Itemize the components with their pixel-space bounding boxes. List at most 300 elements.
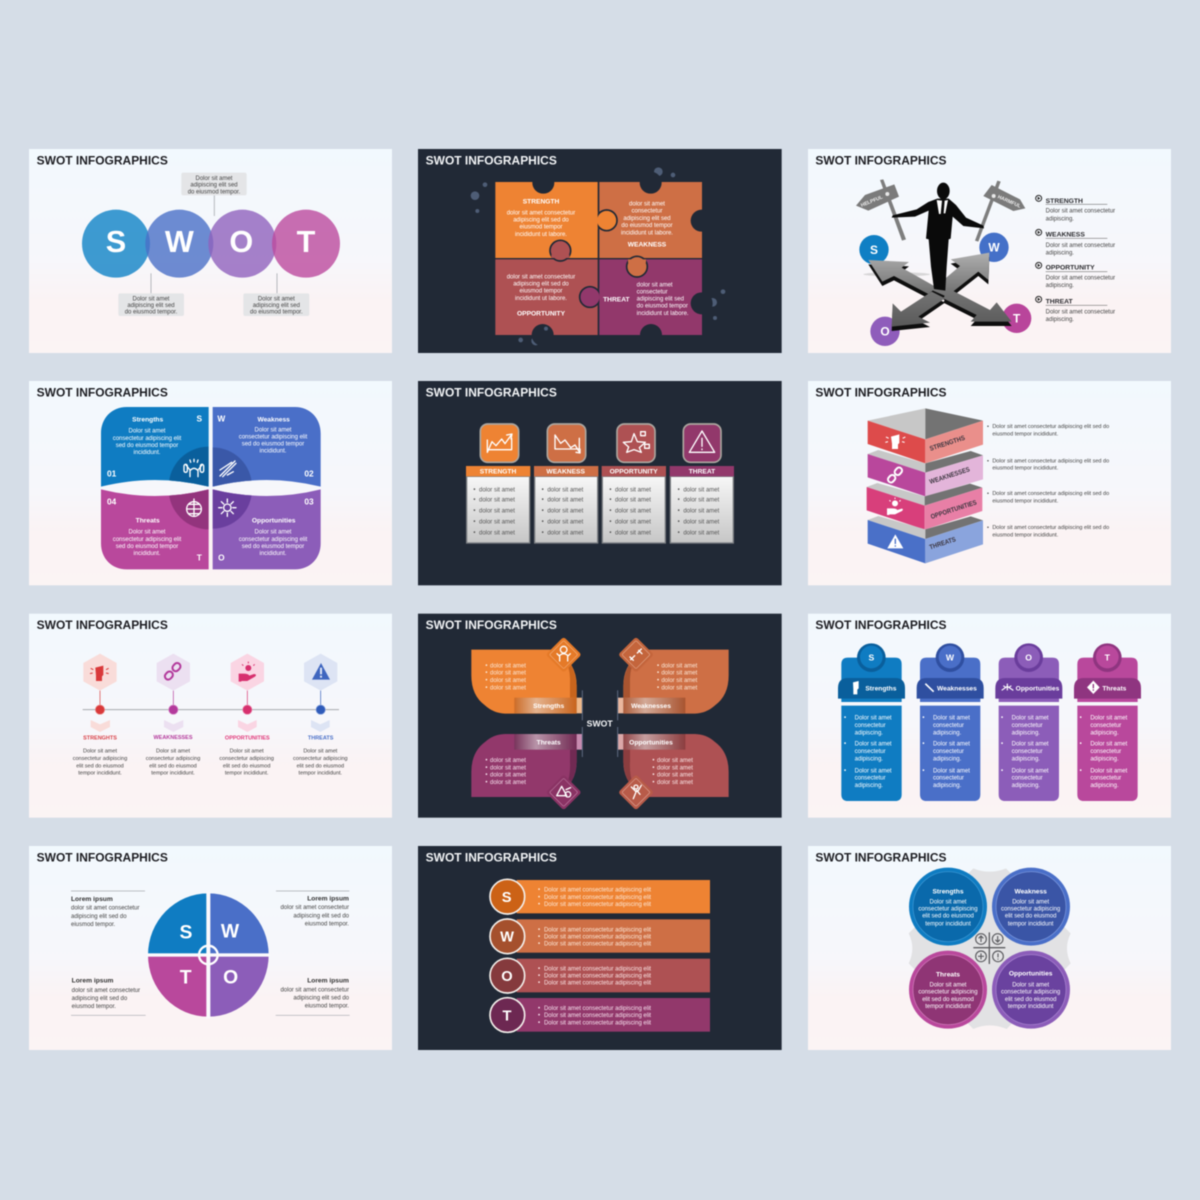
- wing: opportunities: [618, 727, 729, 810]
- column: opportunities: [995, 643, 1062, 801]
- circle: strengths: Strengths: [932, 888, 964, 895]
- quadrant: threats: [100, 488, 210, 570]
- bar S: •: [538, 902, 540, 908]
- note bottom left: [71, 978, 146, 1015]
- bar O: •: [538, 981, 540, 987]
- bullet text group: eiusmod tempor incididunt.: [992, 431, 1059, 437]
- card: opportunity: dolor sit amet: [615, 520, 651, 526]
- card: threat: [670, 466, 734, 543]
- column: threats: consectetur: [1090, 776, 1121, 782]
- note bottom right: adipiscing elit sed do: [293, 996, 350, 1002]
- callout bottom left: adipiscing elit sed: [127, 303, 175, 309]
- callout bottom left: Dolor sit amet: [133, 296, 170, 302]
- step: opportunities: tempor incididunt.: [225, 771, 269, 777]
- column: threats: Dolor sit amet: [1090, 716, 1128, 722]
- block: threats: THREATS: [929, 536, 957, 551]
- bar S: S: [502, 890, 512, 906]
- block: opportunities: [867, 483, 982, 530]
- card: opportunity: •: [609, 531, 611, 537]
- circle: weakness: tempor incididunt: [1008, 921, 1054, 927]
- circle: weakness: Dolor sit amet: [1012, 900, 1049, 906]
- block: weaknesses: [868, 450, 983, 496]
- circle: strengths: Dolor sit amet: [930, 900, 967, 906]
- card: strength: dolor sit amet: [479, 520, 515, 526]
- puzzle piece: strength: dolor sit amet consectetur: [507, 211, 575, 217]
- wing: opportunities: dolor sit amet: [657, 773, 693, 779]
- column: threats: consectetur: [1090, 749, 1121, 755]
- bar W: Dolor sit amet consectetur adipiscing elit: [544, 934, 651, 940]
- card: strength: dolor sit amet: [479, 531, 515, 537]
- list: threat: [1036, 296, 1115, 323]
- column: strengths: •: [844, 716, 846, 722]
- column: weaknesses: Dolor sit amet: [933, 716, 970, 722]
- bullet text group: •: [987, 458, 989, 464]
- card: strength: •: [473, 487, 475, 493]
- bar O: O: [501, 969, 513, 985]
- letter badges: W: [988, 241, 1000, 255]
- quadrant: threats: consectetur adipiscing elit: [113, 537, 182, 543]
- column: weaknesses: Dolor sit amet: [933, 742, 970, 748]
- wing: strengths: •: [485, 678, 487, 684]
- column: threats: Dolor sit amet: [1090, 742, 1128, 748]
- callout bottom left: do eiusmod tempor.: [125, 310, 178, 316]
- wing: strengths: •: [485, 671, 487, 677]
- card: threat: dolor sit amet: [683, 531, 720, 537]
- column: weaknesses: •: [922, 768, 924, 774]
- bar T: •: [538, 1006, 540, 1012]
- card: opportunity: •: [609, 487, 611, 493]
- quadrant: strengths: sed do eiusmod tempor: [116, 443, 178, 449]
- panel: icon cards: [418, 381, 782, 585]
- bar W: Dolor sit amet consectetur adipiscing elit: [544, 927, 651, 933]
- list: opportunity: OPPORTUNITY: [1046, 265, 1095, 272]
- block: strengths: STRENGTHS: [929, 435, 966, 453]
- circle: threats: [909, 951, 987, 1029]
- column: weaknesses: W: [946, 652, 955, 662]
- card: threat: dolor sit amet: [683, 509, 720, 515]
- card: weakness: •: [542, 487, 544, 493]
- column: strengths: •: [844, 768, 846, 774]
- businessman silhouette: [892, 183, 984, 291]
- step: weaknesses: [146, 654, 200, 777]
- panel 10 title: SWOT INFOGRAPHICS: [37, 850, 168, 864]
- quadrant: weakness: consectetur adipiscing elit: [239, 435, 308, 441]
- panel: SWOT circles: [29, 149, 392, 353]
- column: strengths: S: [868, 652, 874, 662]
- puzzle piece: weakness: dolor sit amet: [629, 202, 665, 208]
- circle: opportunities: Dolor sit amet: [1012, 983, 1049, 989]
- quadrant: threats: Threats: [136, 518, 160, 525]
- list: opportunity: [1036, 262, 1115, 289]
- bullet text group: eiusmod tempor incididunt.: [992, 498, 1059, 504]
- card: weakness: dolor sit amet: [547, 487, 584, 493]
- wing: opportunities: •: [652, 758, 654, 764]
- note bottom right: [276, 978, 350, 1015]
- card: threat: •: [678, 531, 680, 537]
- wing: weaknesses: dolor sit amet: [661, 678, 698, 684]
- column: strengths: Dolor sit amet: [855, 742, 892, 748]
- wing: strengths: Strengths: [533, 703, 564, 710]
- puzzle piece: weakness: consectetur: [632, 209, 662, 215]
- quadrant: threats: incididunt.: [134, 551, 161, 557]
- card: strength: •: [473, 520, 475, 526]
- column: threats: •: [1080, 742, 1082, 748]
- card: opportunity: dolor sit amet: [615, 487, 651, 493]
- column: opportunities: consectetur: [1012, 723, 1043, 729]
- list: threat: Dolor sit amet consectetur: [1046, 310, 1115, 316]
- center cross with icons: [973, 932, 1005, 964]
- block: weaknesses: WEAKNESSES: [929, 466, 971, 486]
- callout top: Dolor sit amet: [196, 176, 233, 182]
- timeline axis: [83, 708, 339, 711]
- column: weaknesses: consectetur: [933, 723, 964, 729]
- quadrant: strengths: 01: [107, 469, 117, 479]
- column: weaknesses: •: [922, 742, 924, 748]
- bar W: •: [538, 934, 540, 940]
- card: opportunity: [602, 466, 666, 543]
- note bottom right: eiusmod tempor.: [305, 1004, 349, 1010]
- wing: threats: •: [485, 765, 487, 771]
- panel: puzzle: [418, 149, 782, 353]
- wing: opportunities: Opportunities: [629, 739, 673, 746]
- quadrant: strengths: Strengths: [132, 417, 163, 424]
- note top right: [276, 891, 350, 927]
- circle: strengths: tempor incididunt: [925, 921, 971, 927]
- wing: threats: •: [485, 780, 487, 786]
- puzzle piece: threat: dolor sit amet: [637, 283, 673, 289]
- step: opportunities: [219, 654, 274, 777]
- column: opportunities: Dolor sit amet: [1012, 716, 1049, 722]
- bar T: •: [538, 1020, 540, 1026]
- card: weakness: [534, 466, 598, 543]
- column: opportunities: adipiscing.: [1012, 783, 1040, 789]
- card: strength: •: [473, 509, 475, 515]
- block: opportunities: OPPORTUNITIES: [930, 499, 978, 521]
- bar W: •: [538, 927, 540, 933]
- column: weaknesses: adipiscing.: [933, 783, 962, 789]
- panel 5 title: SWOT INFOGRAPHICS: [426, 386, 557, 400]
- column: opportunities: consectetur: [1012, 749, 1043, 755]
- column: strengths: Strengths: [865, 685, 897, 692]
- quadrant: weakness: [212, 406, 322, 488]
- column: threats: [1074, 643, 1141, 801]
- panel: four circles matrix: [808, 846, 1171, 1050]
- puzzle piece: opportunity: adipiscing elit sed do: [513, 282, 569, 288]
- card: strength: •: [473, 498, 475, 504]
- column: strengths: Dolor sit amet: [855, 716, 892, 722]
- bullet text group: eiusmod tempor incididunt.: [992, 466, 1059, 472]
- circle: weakness: consectetur adipiscing: [1001, 907, 1060, 913]
- puzzle piece: threat: incididunt ut labore.: [637, 311, 689, 317]
- callout bottom right: adipiscing elit sed: [253, 303, 300, 309]
- column: opportunities: Opportunities: [1016, 685, 1060, 692]
- circle: threats: consectetur adipiscing: [918, 990, 978, 996]
- card: threat: •: [678, 498, 680, 504]
- step: opportunities: consectetur adipiscing: [219, 756, 274, 762]
- wing: weaknesses: dolor sit amet: [661, 663, 698, 669]
- column: opportunities: •: [1001, 768, 1003, 774]
- wing: weaknesses: •: [657, 678, 659, 684]
- note top left: [71, 891, 145, 928]
- callout bottom right: Dolor sit amet: [258, 296, 295, 302]
- panel: pie matrix: [29, 846, 392, 1050]
- quadrant: opportunities: sed do eiusmod tempor: [242, 544, 304, 550]
- card: opportunity: •: [609, 520, 611, 526]
- card: weakness: •: [542, 498, 544, 504]
- quadrant: strengths: consectetur adipiscing elit: [113, 436, 182, 442]
- column: threats: adipiscing.: [1090, 783, 1119, 789]
- column: opportunities: •: [1001, 716, 1003, 722]
- column: strengths: consectetur: [855, 776, 886, 782]
- panel 12 title: SWOT INFOGRAPHICS: [815, 850, 947, 864]
- circle: opportunities: Opportunities: [1009, 970, 1053, 977]
- wing: threats: [471, 727, 582, 810]
- circle: opportunities: consectetur adipiscing: [1001, 990, 1060, 996]
- puzzle piece: weakness: do eiusmod tempor: [621, 223, 673, 229]
- puzzle piece: weakness: [599, 172, 713, 258]
- panel 3 title: SWOT INFOGRAPHICS: [815, 153, 947, 167]
- column: threats: adipiscing.: [1090, 730, 1119, 736]
- puzzle piece: threat: [599, 259, 713, 346]
- puzzle piece: opportunity: dolor sit amet consectetur: [507, 275, 575, 281]
- bar O: •: [538, 974, 540, 980]
- panel: four petal quadrants: [29, 381, 392, 585]
- quadrant: opportunities: Dolor sit amet: [255, 530, 292, 536]
- card: weakness: dolor sit amet: [547, 520, 584, 526]
- step: strengths: STRENGHTS: [83, 736, 117, 742]
- gray backing shape: [909, 868, 1071, 1029]
- bar T: T: [503, 1008, 512, 1024]
- bar O: Dolor sit amet consectetur adipiscing elit: [544, 974, 651, 980]
- panel: badge columns: [808, 614, 1171, 818]
- note top right: adipiscing elit sed do: [293, 913, 350, 919]
- puzzle piece: opportunity: incididunt ut labore.: [515, 296, 567, 302]
- card: threat: •: [678, 487, 680, 493]
- puzzle piece: opportunity: OPPORTUNITY: [517, 310, 566, 317]
- pie of four quadrants: S: [180, 922, 193, 943]
- panel 5 background: [418, 381, 782, 585]
- column: weaknesses: Dolor sit amet: [933, 768, 970, 774]
- bar T: •: [538, 1013, 540, 1019]
- circle: weakness: [992, 868, 1070, 946]
- step: weaknesses: consectetur adipiscing: [146, 756, 200, 762]
- wing: threats: •: [485, 773, 487, 779]
- wing: strengths: dolor sit amet: [490, 671, 526, 677]
- bar S: Dolor sit amet consectetur adipiscing elit: [544, 902, 651, 908]
- circle: threats: Threats: [936, 971, 960, 978]
- wing: weaknesses: Weaknesses: [631, 703, 671, 710]
- quadrant: threats: Dolor sit amet: [129, 530, 166, 536]
- bullet text group: •: [987, 525, 989, 531]
- column: threats: adipiscing.: [1090, 757, 1119, 763]
- card: threat: •: [678, 509, 680, 515]
- card: weakness: dolor sit amet: [547, 498, 584, 504]
- panel 3 background: [808, 149, 1171, 353]
- column: opportunities: O: [1025, 652, 1032, 662]
- step: threats: consectetur adipiscing: [293, 756, 348, 762]
- note top left: Lorem ipsum: [71, 896, 113, 903]
- bullet text group: •: [987, 491, 989, 497]
- circle: threats: tempor incididunt: [925, 1004, 971, 1010]
- quadrant: weakness: 02: [304, 469, 314, 479]
- bar W: [490, 919, 710, 954]
- quadrant: opportunities: O: [218, 552, 225, 562]
- column: threats: •: [1080, 716, 1082, 722]
- quadrant: threats: T: [197, 552, 202, 562]
- bullet text group: Dolor sit amet consectetur adipiscing elit sed do: [992, 458, 1109, 464]
- panel 2 background: [418, 149, 782, 353]
- card: threat: dolor sit amet: [683, 520, 720, 526]
- bar O: Dolor sit amet consectetur adipiscing elit: [544, 981, 651, 987]
- note bottom right: dolor sit amet consectetur: [280, 988, 349, 994]
- column: strengths: adipiscing.: [855, 783, 883, 789]
- column: strengths: adipiscing.: [855, 757, 883, 763]
- icon: strength chart up: [480, 424, 519, 462]
- card: weakness: dolor sit amet: [547, 509, 584, 515]
- signpost helpful: HELPFUL: [860, 195, 884, 209]
- bar W: •: [538, 942, 540, 948]
- card: opportunity: •: [609, 509, 611, 515]
- signpost helpful: [856, 179, 906, 241]
- column: weaknesses: [917, 643, 984, 801]
- column: opportunities: adipiscing.: [1012, 757, 1040, 763]
- pie of four quadrants: [147, 892, 270, 1018]
- bullet text group: Dolor sit amet consectetur adipiscing elit sed do: [992, 525, 1109, 531]
- card: threat: dolor sit amet: [683, 487, 720, 493]
- wing: opportunities: dolor sit amet: [657, 780, 693, 786]
- panel 11 background: [418, 846, 782, 1050]
- bar T: Dolor sit amet consectetur adipiscing elit: [544, 1006, 651, 1012]
- circle: strengths: consectetur adipiscing: [918, 907, 978, 913]
- column: weaknesses: adipiscing.: [933, 730, 962, 736]
- quadrant: opportunities: Opportunities: [252, 518, 296, 525]
- note bottom left: Lorem ipsum: [72, 978, 114, 985]
- icon: weakness chart down: [547, 424, 586, 462]
- step: opportunities: elit sed do eiusmod: [223, 763, 270, 769]
- circle: opportunities: elit sed do eiusmod: [1005, 997, 1056, 1003]
- column: strengths: consectetur: [855, 723, 886, 729]
- four overlapping letter circles: O: [229, 225, 253, 259]
- callout bottom right: do eiusmod tempor.: [250, 310, 303, 316]
- puzzle piece: opportunity: [495, 259, 598, 346]
- column: strengths: adipiscing.: [855, 730, 883, 736]
- panel 8 title: SWOT INFOGRAPHICS: [426, 618, 557, 632]
- wing: opportunities: dolor sit amet: [657, 765, 693, 771]
- wing: opportunities: •: [652, 773, 654, 779]
- letter badges: [859, 233, 1031, 346]
- column: strengths: Dolor sit amet: [855, 768, 892, 774]
- quadrant: threats: sed do eiusmod tempor: [116, 544, 178, 550]
- quadrant: weakness: sed do eiusmod tempor: [242, 442, 304, 448]
- note top left: adipiscing elit sed do: [71, 914, 127, 920]
- wing: opportunities: •: [652, 765, 654, 771]
- wing: strengths: •: [485, 685, 487, 691]
- puzzle piece: threat: adipiscing elit sed: [637, 297, 684, 303]
- bar T: Dolor sit amet consectetur adipiscing elit: [544, 1013, 651, 1019]
- bar W: W: [500, 930, 514, 946]
- puzzle piece: strength: [495, 172, 598, 258]
- panel 9 background: [808, 614, 1171, 818]
- circle: opportunities: [992, 951, 1070, 1029]
- column: weaknesses: consectetur: [933, 776, 964, 782]
- quadrant: weakness: W: [217, 414, 225, 424]
- list: strength: [1036, 195, 1115, 222]
- step: strengths: elit sed do eiusmod: [76, 763, 124, 769]
- four overlapping letter circles: T: [297, 225, 316, 259]
- list: strength: adipiscing.: [1046, 216, 1074, 222]
- quadrant: strengths: [100, 406, 210, 488]
- wing: weaknesses: •: [657, 685, 659, 691]
- card: opportunity: dolor sit amet: [615, 509, 651, 515]
- puzzle piece: threat: consectetur: [637, 290, 668, 296]
- circle: strengths: elit sed do eiusmod: [922, 914, 974, 920]
- panel 2 title: SWOT INFOGRAPHICS: [426, 153, 557, 167]
- pie of four quadrants: T: [180, 968, 192, 989]
- wing: threats: dolor sit amet: [490, 758, 526, 764]
- circle: weakness: Weakness: [1014, 888, 1047, 895]
- column: threats: T: [1105, 652, 1111, 662]
- letter badges: S: [870, 243, 878, 257]
- list: weakness: WEAKNESS: [1046, 232, 1085, 239]
- wing: weaknesses: •: [657, 671, 659, 677]
- panel: stacked bars: [418, 846, 782, 1050]
- column: threats: consectetur: [1090, 723, 1121, 729]
- panel 1 title: SWOT INFOGRAPHICS: [37, 153, 168, 167]
- card: weakness: dolor sit amet: [547, 531, 584, 537]
- column: strengths: •: [844, 742, 846, 748]
- wing: threats: •: [485, 758, 487, 764]
- wing: weaknesses: [618, 637, 729, 720]
- note top left: eiusmod tempor.: [71, 922, 116, 928]
- card: threat: THREAT: [689, 469, 715, 476]
- wing: threats: Threats: [537, 739, 561, 746]
- card: threat: •: [678, 520, 680, 526]
- step: threats: tempor incididunt.: [299, 771, 343, 777]
- bar T: Dolor sit amet consectetur adipiscing elit: [544, 1020, 651, 1026]
- crossing arrows: [863, 253, 1012, 331]
- bar S: [490, 879, 710, 914]
- step: threats: [293, 654, 348, 777]
- card: weakness: •: [542, 509, 544, 515]
- four overlapping letter circles: [82, 210, 340, 278]
- bar O: Dolor sit amet consectetur adipiscing elit: [544, 967, 651, 973]
- column: opportunities: consectetur: [1012, 776, 1043, 782]
- letter badges: O: [880, 325, 890, 339]
- wing: threats: dolor sit amet: [490, 765, 526, 771]
- list: opportunity: Dolor sit amet consectetur: [1046, 276, 1115, 282]
- quadrant: threats: 04: [107, 496, 117, 506]
- puzzle piece: strength: incididunt ut labore.: [515, 232, 567, 238]
- panel: crossroads businessman: [808, 149, 1171, 353]
- puzzle piece: weakness: incididunt ut labore.: [621, 230, 673, 236]
- note top right: eiusmod tempor.: [305, 921, 349, 927]
- card: opportunity: OPPORTUNITY: [610, 469, 658, 476]
- card: opportunity: dolor sit amet: [615, 531, 651, 537]
- list: opportunity: adipiscing.: [1046, 283, 1074, 289]
- signpost harmful: [975, 181, 1025, 242]
- four overlapping letter circles: W: [165, 225, 194, 259]
- card: opportunity: dolor sit amet: [615, 498, 651, 504]
- circle: threats: elit sed do eiusmod: [922, 997, 974, 1003]
- step: threats: Dolor sit amet: [303, 749, 338, 755]
- list: strength: STRENGTH: [1046, 198, 1083, 205]
- step: weaknesses: Dolor sit amet: [156, 749, 190, 755]
- wing: opportunities: •: [652, 780, 654, 786]
- column: opportunities: Dolor sit amet: [1012, 742, 1049, 748]
- bullet text group: •: [987, 424, 989, 430]
- bar S: •: [538, 895, 540, 901]
- decorative bubbles: [471, 167, 725, 345]
